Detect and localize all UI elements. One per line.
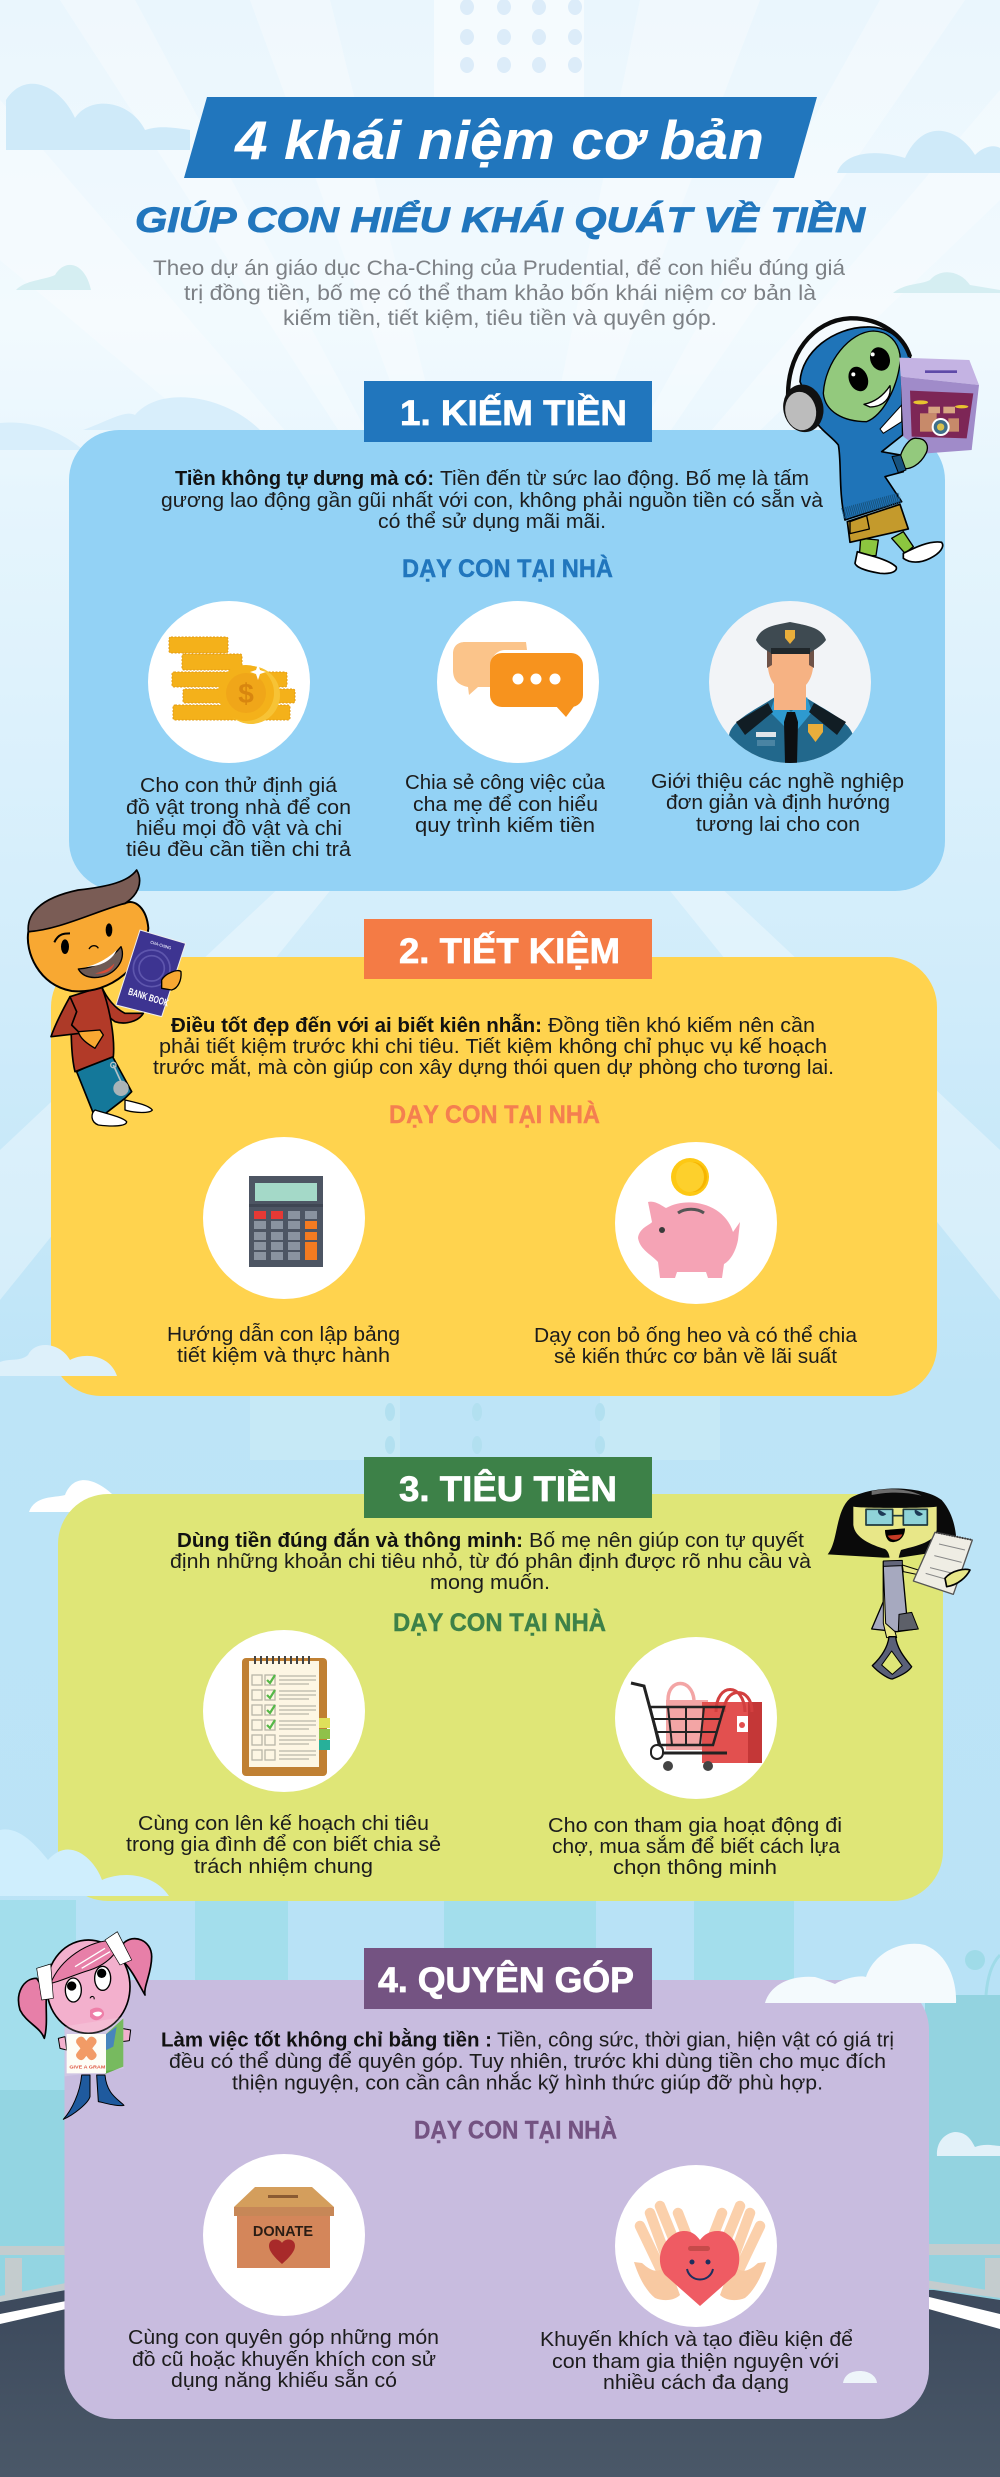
- caption: thiện nguyện: [540, 2329, 853, 2394]
- intro paragraph: [153, 256, 845, 330]
- icon: donate box: DONATE: [253, 2224, 313, 2240]
- background clouds behind panels: [0, 84, 1000, 1512]
- heading: 3. tiêu tiền: [364, 1457, 652, 1518]
- caption: kế hoạch chi tiêu: trong gia đình để con biết chia sẻ: [126, 1834, 441, 1856]
- caption: chia sẻ công việc: cha mẹ để con hiểu: [413, 794, 598, 816]
- cloud right of panel 4: [937, 2132, 1000, 2156]
- icon: police officer: [709, 601, 871, 763]
- icon: gold coins: [148, 601, 310, 763]
- body text: đều có thể dùng để quyên góp. Tuy nhiên, trước khi dùng tiền cho mục đích: [169, 2051, 886, 2073]
- character: boy with bank book: CHA-CHING: [150, 940, 172, 951]
- caption: đồ cũ: [128, 2327, 439, 2392]
- body text: Tiền đến từ sức lao động. Bố mẹ là tấm: [440, 468, 809, 490]
- caption: kế hoạch chi tiêu: Cùng con lên kế hoạch chi tiêu: [138, 1813, 429, 1835]
- body text: trước mắt, mà còn giúp con xây dựng thói quen dự phòng cho tương lai.: [153, 1056, 834, 1079]
- caption: chia sẻ công việc: Chia sẻ công việc của: [405, 772, 606, 794]
- caption: thiện nguyện: Khuyến khích và tạo điều kiện để: [540, 2329, 853, 2351]
- body text: Làm việc tốt không chỉ bằng tiền :: [161, 2028, 492, 2052]
- character: boy with bank book: BANK BOOK: [127, 987, 170, 1010]
- character: green alien with donation box: [779, 318, 979, 574]
- cloud over panel corner: [0, 1345, 117, 1376]
- body text: Tiền, công sức, thời gian, hiện vật có giá trị: [497, 2030, 894, 2052]
- panel: 3. tiêu tiền: [0, 1457, 943, 1901]
- caption: kế hoạch chi tiêu: [126, 1813, 441, 1878]
- icon: speech bubbles: [437, 601, 599, 763]
- body text: có thể sử dụng mãi mãi.: [378, 511, 606, 533]
- title banner: [184, 97, 817, 178]
- cloud over panel corner: [0, 1829, 169, 1896]
- caption: ống heo: [534, 1325, 858, 1368]
- caption: định giá: hiểu mọi đồ vật và chi: [136, 818, 342, 840]
- intro paragraph: kiếm tiền, tiết kiệm, tiêu tiền và quyên góp.: [283, 306, 717, 330]
- caption: lập bảng tiết kiệm: tiết kiệm và thực hành: [177, 1345, 390, 1367]
- subtitle: GIÚP CON HIỂU KHÁI QUÁT VỀ TIỀN: [135, 200, 866, 240]
- caption: đồ cũ: dụng năng khiếu sẵn có: [171, 2369, 397, 2392]
- caption: nghề nghiệp: đơn giản và định hướng: [666, 792, 890, 814]
- character: pink pigtail girl with donation bag: [19, 1932, 152, 2119]
- icon: calculator: [203, 1137, 365, 1299]
- body text: mong muốn.: [430, 1572, 550, 1594]
- heading: 3. tiêu tiền: 3. TIÊU TIỀN: [399, 1469, 617, 1509]
- character: pink pigtail girl with donation bag: GIVE A GRAM: [69, 2064, 105, 2070]
- caption: đi chợ: chọn thông minh: [613, 1857, 777, 1879]
- caption: định giá: [126, 775, 352, 861]
- heading: 2. tiết kiệm: [364, 919, 652, 979]
- caption: đồ cũ: Cùng con quyên góp những món: [128, 2327, 439, 2349]
- subheading: DẠY CON TẠI NHÀ: [389, 1100, 600, 1129]
- caption: thiện nguyện: con tham gia thiện nguyện với: [552, 2351, 839, 2373]
- heading: 1. kiếm tiền: 1. KIẾM TIỀN: [400, 393, 627, 433]
- cloud over panel top right: [765, 1944, 956, 2003]
- body text: thiện nguyện, con cần cân nhắc kỹ hình thức giúp đỡ phù hợp.: [232, 2072, 823, 2094]
- caption: nghề nghiệp: [651, 771, 904, 836]
- caption: đi chợ: Cho con tham gia hoạt động đi: [548, 1815, 842, 1837]
- heading: 4. quyên góp: 4. QUYÊN GÓP: [378, 1960, 634, 2000]
- caption: lập bảng tiết kiệm: Hướng dẫn con lập bảng: [167, 1323, 400, 1346]
- icon: donate box: [203, 2154, 365, 2316]
- caption: đi chợ: [548, 1815, 842, 1879]
- body text: [153, 1013, 834, 1079]
- icon: gold coins: $: [238, 678, 254, 709]
- body text: Đồng tiền khó kiếm nên cần: [548, 1015, 815, 1037]
- body text: Dùng tiền đúng đắn và thông minh:: [177, 1528, 523, 1552]
- body text: Điều tốt đẹp đến với ai biết kiên nhẫn:: [171, 1013, 542, 1037]
- caption: định giá: đồ vật trong nhà để con: [126, 797, 351, 819]
- panel: 1. kiếm tiền: [69, 381, 945, 891]
- caption: kế hoạch chi tiêu: trách nhiệm chung: [194, 1856, 373, 1878]
- caption: lập bảng tiết kiệm: [167, 1323, 400, 1367]
- body text: [161, 468, 824, 533]
- panel: 4. quyên góp: [64, 1944, 956, 2419]
- character: boy with bank book: [28, 870, 186, 1126]
- icon: shopping cart and bags: [615, 1637, 777, 1799]
- caption: nghề nghiệp: Giới thiệu các nghề nghiệp: [651, 771, 904, 793]
- icon: piggy bank: [615, 1142, 777, 1304]
- subheading: DẠY CON TẠI NHÀ: [393, 1608, 606, 1637]
- subheading: DẠY CON TẠI NHÀ: [402, 554, 613, 583]
- icon: hands holding smiling heart: [615, 2165, 777, 2327]
- intro paragraph: Theo dự án giáo dục Cha-Ching của Prudential, để con hiểu đúng giá: [153, 256, 845, 280]
- subheading: DẠY CON TẠI NHÀ: [414, 2116, 617, 2144]
- heading: 1. kiếm tiền: [364, 381, 652, 442]
- caption: thiện nguyện: nhiều cách đa dạng: [603, 2372, 789, 2394]
- panel: 2. tiết kiệm: [0, 919, 937, 1396]
- intro paragraph: trị đồng tiền, bố mẹ có thể tham khảo bốn khái niệm cơ bản là: [184, 281, 816, 305]
- body text: định những khoản chi tiêu nhỏ, từ đó phân định được rõ nhu cầu và: [170, 1551, 812, 1573]
- caption: đi chợ: chợ, mua sắm để biết cách lựa: [552, 1835, 841, 1858]
- caption: chia sẻ công việc: quy trình kiếm tiền: [415, 815, 595, 837]
- body text: gương lao động gần gũi nhất với con, không phải nguồn tiền có sẵn và: [161, 489, 824, 512]
- heading: 4. quyên góp: [364, 1948, 652, 2009]
- caption: ống heo: Dạy con bỏ ống heo và có thể chia: [534, 1325, 858, 1347]
- title banner: 4 khái niệm cơ bản: [234, 109, 764, 171]
- body text: Bố mẹ nên giúp con tự quyết: [529, 1530, 804, 1552]
- caption: ống heo: sẻ kiến thức cơ bản về lãi suất: [554, 1346, 837, 1368]
- body text: Tiền không tự dưng mà có:: [175, 468, 434, 490]
- character: girl with glasses and notepad: [828, 1489, 972, 1679]
- body text: phải tiết kiệm trước khi chi tiêu. Tiết kiệm không chỉ phục vụ kế hoạch: [159, 1036, 827, 1058]
- caption: chia sẻ công việc: [405, 772, 606, 837]
- heading: 2. tiết kiệm: 2. TIẾT KIỆM: [399, 931, 620, 971]
- caption: nghề nghiệp: tương lai cho con: [696, 814, 860, 836]
- icon: checklist clipboard: [203, 1630, 365, 1792]
- body text: [170, 1528, 812, 1594]
- caption: đồ cũ: đồ cũ hoặc khuyến khích con sử: [132, 2349, 436, 2371]
- caption: định giá: tiêu đều cần tiền chi trả: [126, 839, 352, 861]
- caption: định giá: Cho con thử định giá: [140, 775, 338, 797]
- small cloud: [843, 2371, 877, 2383]
- body text: [161, 2028, 894, 2094]
